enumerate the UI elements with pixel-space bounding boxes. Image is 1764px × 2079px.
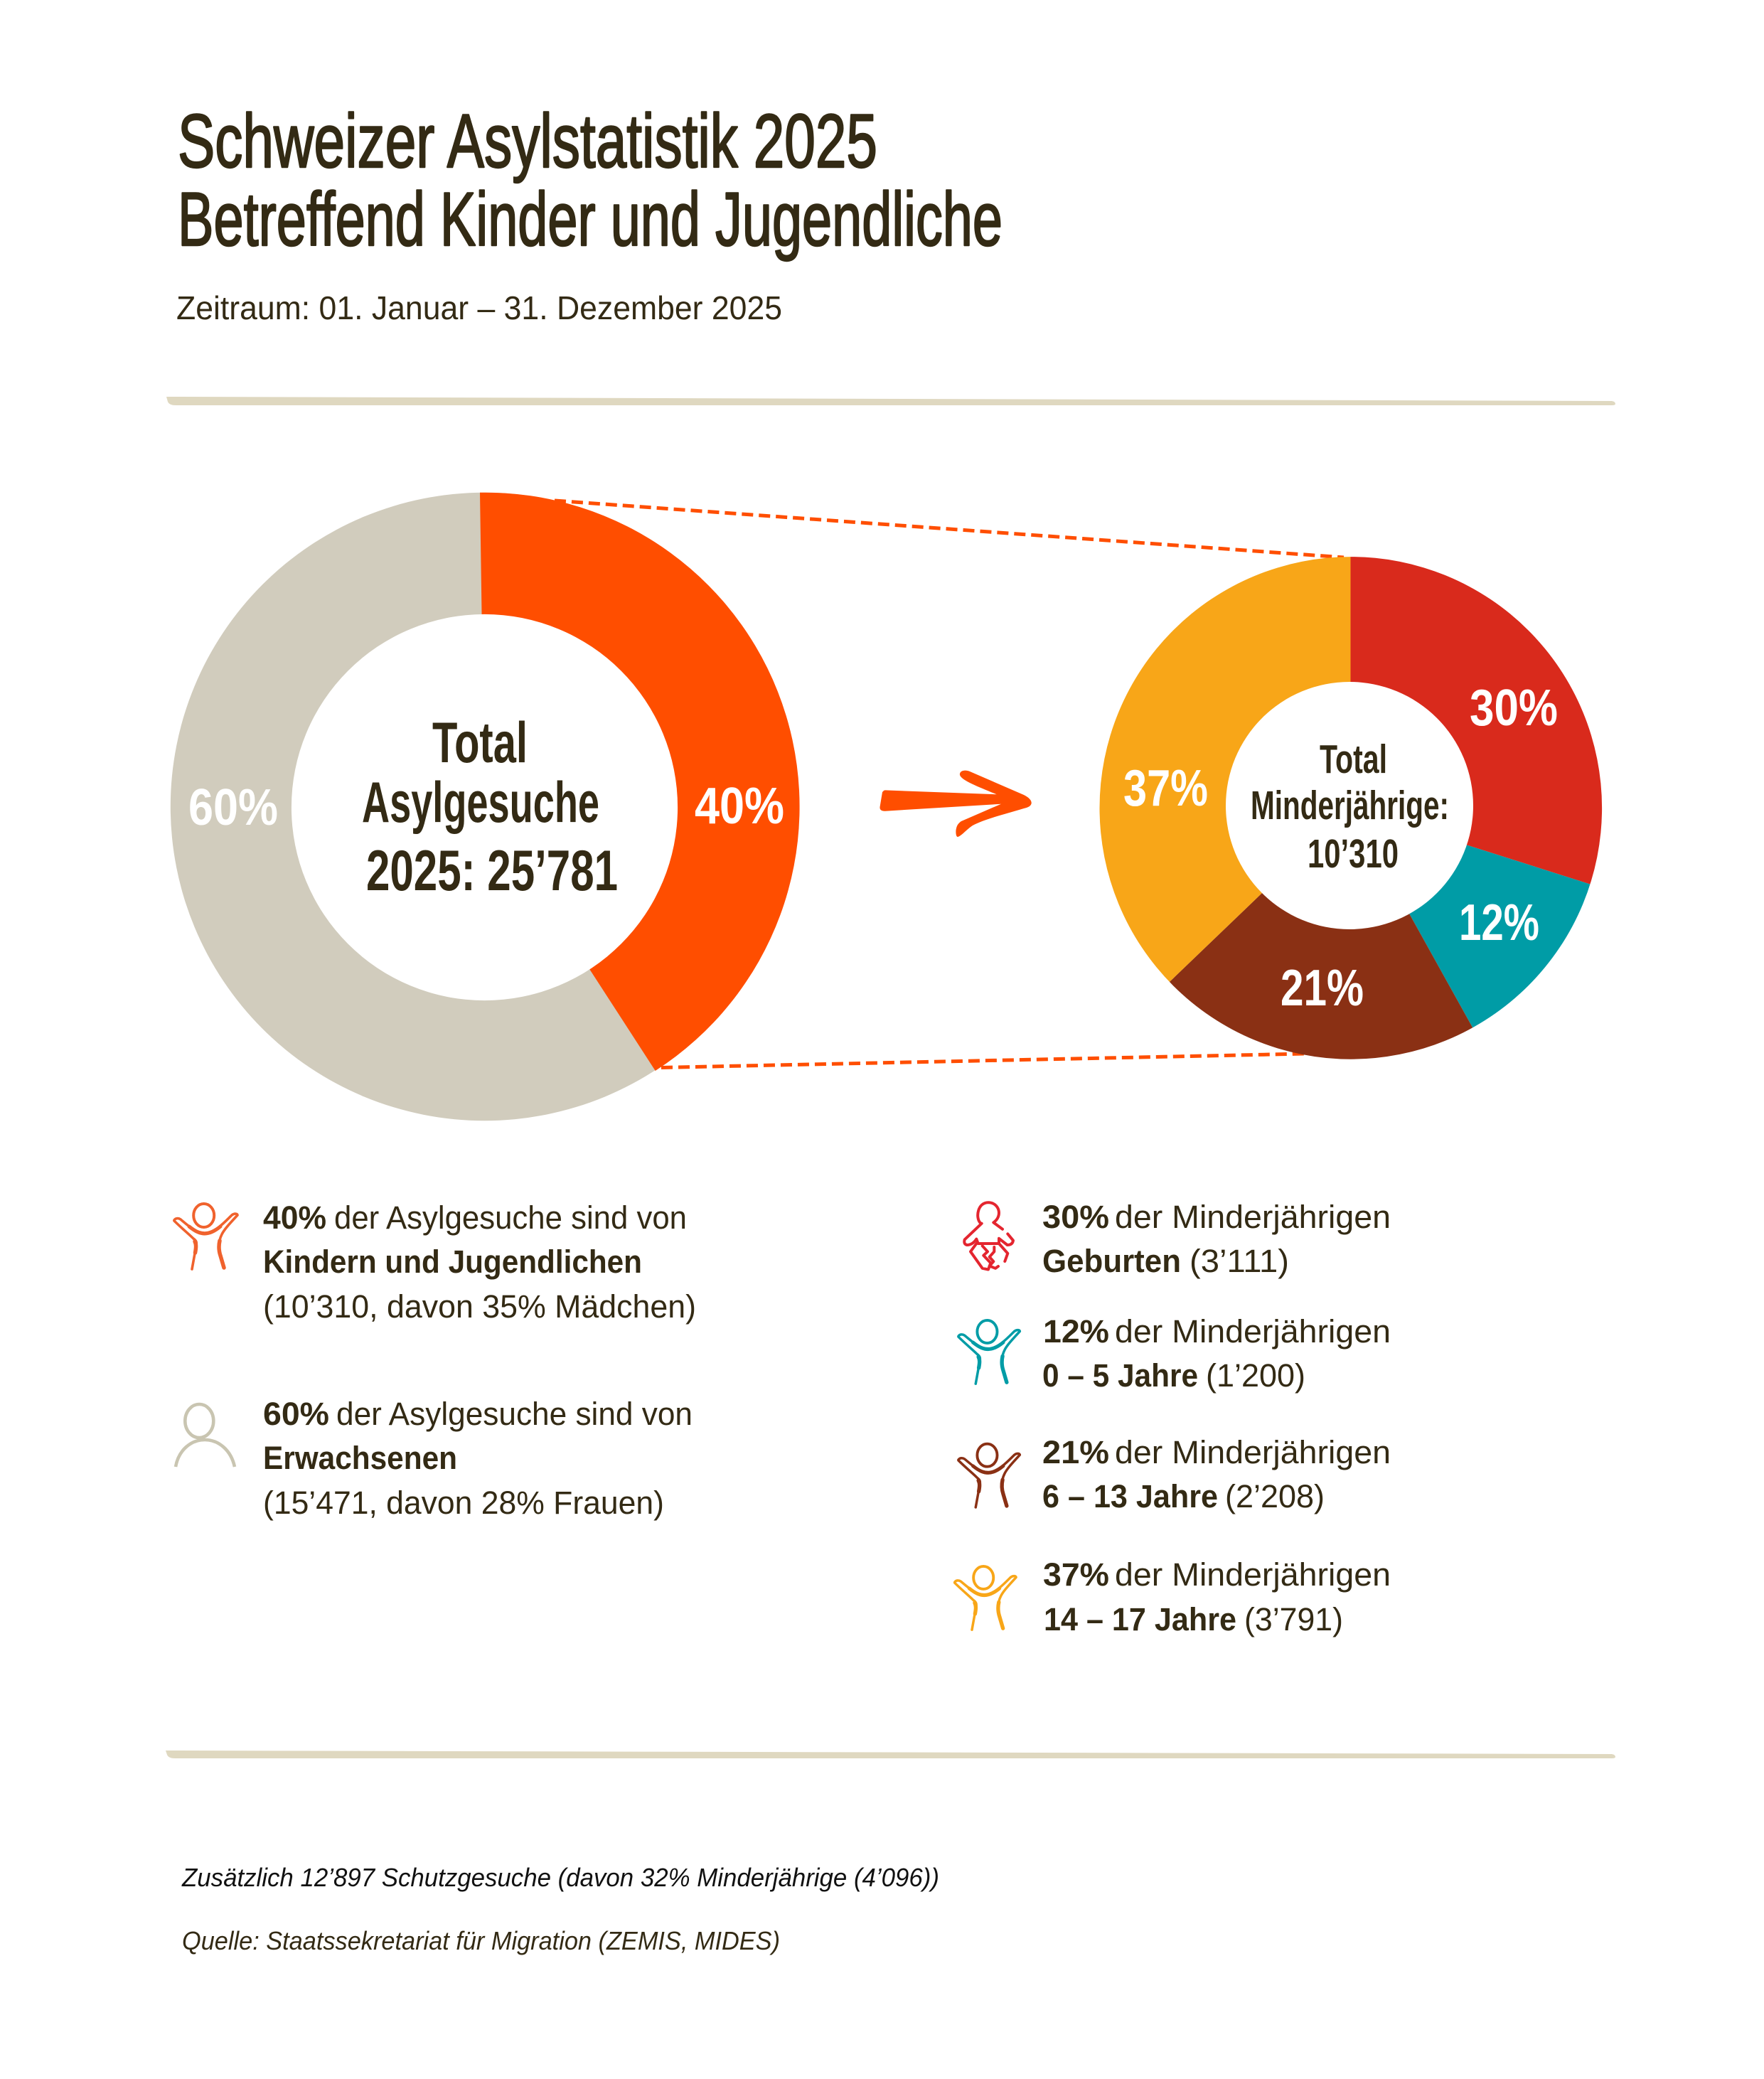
centre text: total applications: Total [432,711,528,775]
centre text: total applications [362,711,618,903]
centre text: total minors: Total [1320,737,1387,782]
legend text: 37% age 14-17: (3’791) [1244,1601,1343,1637]
legend text: 21% age 6-13: (2’208) [1225,1478,1325,1514]
legend text: 60% adults: 60% [263,1396,329,1432]
title: Schweizer Asylstatistik 2025 [178,98,877,183]
legend text: 12% age 0-5: (1’200) [1206,1357,1305,1394]
legend text: 60% adults [263,1396,693,1521]
legend text: 60% adults: der Asylgesuche sind von [336,1396,693,1432]
legend text: 30% births: Geburten [1042,1243,1181,1279]
legend text: 12% age 0-5: 0 – 5 Jahre [1042,1357,1198,1394]
bottom divider [166,1751,1615,1758]
arrow [880,771,1032,837]
legend text: 12% age 0-5: der Minderjährigen [1115,1313,1391,1350]
footnote: source: Quelle: Staatssekretariat für Migration (ZEMIS, MIDES) [182,1926,780,1955]
legend text: 21% age 6-13: 6 – 13 Jahre [1042,1478,1218,1514]
legend text: 12% age 0-5: 12% [1043,1313,1109,1350]
legend text: 40% minors [263,1199,696,1325]
label: 21%: 21% [1281,960,1364,1017]
legend text: 30% births: 30% [1042,1199,1109,1235]
legend text: 37% age 14-17: 37% [1043,1556,1109,1593]
legend text: 30% births [1042,1199,1391,1279]
centre text: total applications: 2025: 25’781 [366,839,618,903]
legend text: 60% adults: Erwachsenen [263,1440,457,1476]
label: 60%: 60% [188,779,278,836]
legend text: 37% age 14-17: der Minderjährigen [1115,1556,1391,1593]
label: 12%: 12% [1459,894,1539,951]
top divider [166,397,1615,405]
icon: child brown [958,1444,1020,1507]
centre text: total minors: 10’310 [1308,831,1399,877]
segment: 21% age 6-13 [1170,893,1473,1059]
donut chart: minors by age [1099,557,1603,1059]
legend text: 30% births: (3’111) [1190,1243,1289,1279]
dashed connector lines [555,501,1344,1068]
icon: child orange [174,1204,237,1269]
label: 40%: 40% [695,778,784,835]
icon: baby red [964,1202,1013,1270]
segment: 30% births [1351,557,1603,884]
icon: adult person [176,1404,235,1467]
legend text: 30% births: der Minderjährigen [1115,1199,1391,1235]
footnote: protection requests: Zusätzlich 12’897 Schutzgesuche (davon 32% Minderjährige (4’096)) [181,1863,939,1892]
centre text: total applications: Asylgesuche [362,771,599,835]
label: 30%: 30% [1470,680,1558,737]
legend text: 21% age 6-13 [1042,1434,1391,1514]
legend text: 37% age 14-17 [1043,1556,1391,1637]
legend text: 40% minors: (10’310, davon 35% Mädchen) [263,1288,696,1325]
centre text: total minors [1251,737,1449,877]
segment: 40% minors [480,493,800,1071]
donut chart: total asylum applications [171,493,800,1121]
segment: 12% age 0-5 [1409,845,1590,1028]
label: 37%: 37% [1123,760,1208,817]
title [178,98,1003,262]
legend text: 12% age 0-5 [1042,1313,1391,1394]
title: Betreffend Kinder und Jugendliche [178,176,1003,262]
legend text: 21% age 6-13: der Minderjährigen [1115,1434,1391,1470]
legend text: 60% adults: (15’471, davon 28% Frauen) [263,1485,664,1521]
legend text: 40% minors: der Asylgesuche sind von [334,1199,687,1236]
legend text: 40% minors: 40% [263,1199,326,1236]
segment: 37% age 14-17 [1099,557,1351,982]
legend text: 40% minors: Kindern und Jugendlichen [263,1244,642,1280]
legend text: 21% age 6-13: 21% [1042,1434,1109,1470]
icon: child yellow [955,1566,1016,1630]
subtitle: period: Zeitraum: 01. Januar – 31. Dezember 2025 [176,289,782,326]
icon: child teal [958,1320,1020,1384]
legend text: 37% age 14-17: 14 – 17 Jahre [1044,1601,1236,1637]
centre text: total minors: Minderjährige: [1251,783,1449,828]
